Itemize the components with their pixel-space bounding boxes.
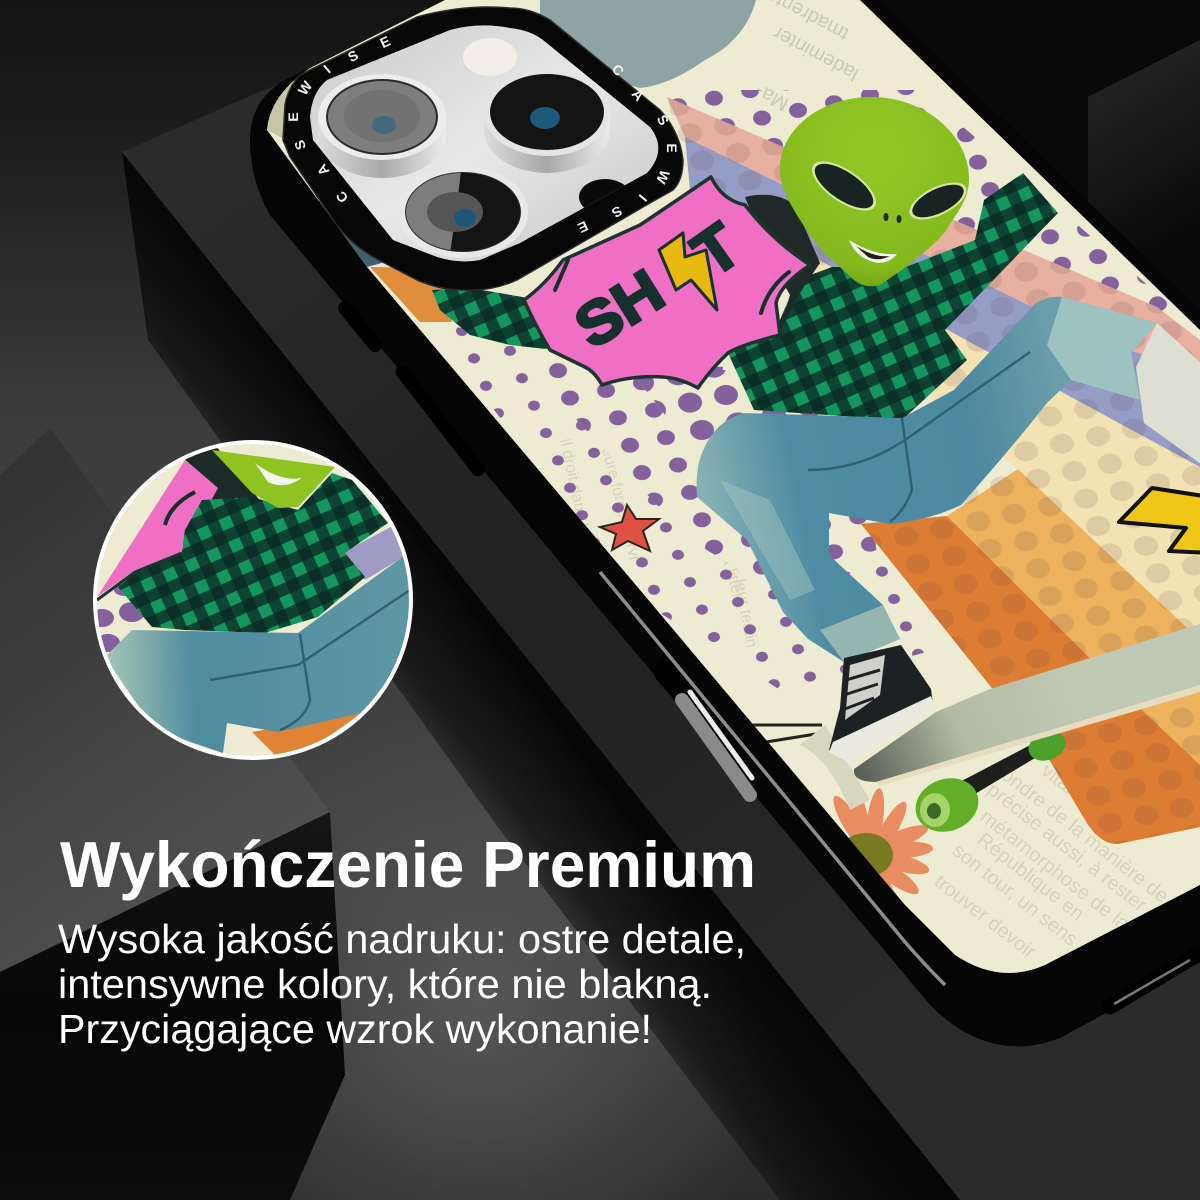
casewise lettering: I	[636, 191, 650, 205]
skateboard	[854, 624, 1200, 840]
casewise lettering: E	[377, 33, 393, 51]
star	[600, 505, 659, 551]
casewise lettering: I	[320, 62, 334, 76]
detail magnifier circle	[90, 440, 420, 760]
body text: Wysoka jakość nadruku: ostre detale,	[58, 916, 746, 962]
glossy rim highlight	[600, 572, 945, 985]
newsprint text: rieure force tourvi	[596, 437, 643, 562]
backpack	[745, 195, 820, 335]
newsprint text: vitar de la	[1037, 760, 1119, 831]
phone in black case	[250, 0, 1200, 1046]
casewise lettering: C	[332, 188, 351, 206]
lightning bolt	[1119, 488, 1200, 553]
speed lines and board shadow	[747, 725, 870, 810]
side buttons	[345, 308, 1197, 1007]
printed artwork	[260, 0, 1200, 1000]
casewise lettering: S	[345, 47, 361, 65]
flash	[463, 38, 517, 76]
plaid shirt	[728, 173, 1058, 420]
casewise lettering: C	[609, 61, 627, 79]
casewise lettering: S	[291, 138, 309, 152]
casewise lettering: A	[313, 161, 332, 179]
body text	[58, 916, 746, 1052]
casewise lettering: S	[654, 112, 672, 128]
lens: telephoto	[405, 172, 528, 258]
newsprint text: Serge didier	[741, 501, 784, 589]
casewise lettering: E	[575, 218, 591, 236]
casewise lettering	[285, 33, 680, 236]
casewise lettering: E	[285, 112, 301, 122]
newsprint text: Serge Sinfra littéra	[698, 477, 749, 609]
comic burst with word	[524, 177, 810, 388]
newsprint text: leur testin	[731, 578, 760, 649]
newsprint text: République en	[973, 829, 1088, 925]
lens: main	[484, 70, 610, 173]
right sneaker	[1136, 323, 1200, 467]
newsprint text	[556, 0, 1173, 963]
newsprint text: ondre de la manière de	[997, 764, 1173, 908]
pastel stripes	[667, 97, 1200, 640]
jeans	[697, 297, 1157, 662]
heading: Wykończenie Premium	[60, 828, 756, 901]
casewise lettering: W	[295, 77, 316, 98]
comic burst with word: T	[680, 209, 753, 290]
mic hole	[579, 179, 625, 208]
camera island	[283, 7, 683, 290]
plaid left sleeve	[432, 288, 555, 350]
casewise lettering: S	[609, 203, 625, 221]
body text: Przyciągające wzrok wykonanie!	[58, 1006, 652, 1052]
alien head	[780, 97, 972, 286]
newsprint text: son tour, un sens	[948, 840, 1082, 951]
newsprint text: métamorphose de la	[976, 806, 1134, 936]
left sneaker	[829, 645, 935, 762]
orange stripes	[861, 469, 1200, 844]
newsprint text: Ma-	[752, 79, 792, 115]
newsprint text: il droit dans la ste	[556, 437, 599, 563]
comic burst with word: SH	[563, 257, 675, 361]
purple halftone dots	[425, 90, 1200, 690]
newsprint text: lademinter	[769, 22, 862, 85]
lens: ultra wide	[318, 74, 446, 178]
body text: intensywne kolory, które nie blakną.	[58, 961, 712, 1007]
case body	[250, 0, 1200, 1046]
casewise lettering: A	[629, 86, 647, 104]
newsprint text: précise aussi, à rester	[983, 779, 1151, 917]
flower	[834, 788, 933, 894]
casewise lettering: W	[653, 168, 673, 187]
blue painted cloud	[540, 0, 756, 88]
casewise lettering: E	[664, 143, 680, 153]
newsprint text: trouver devoir	[930, 871, 1040, 963]
